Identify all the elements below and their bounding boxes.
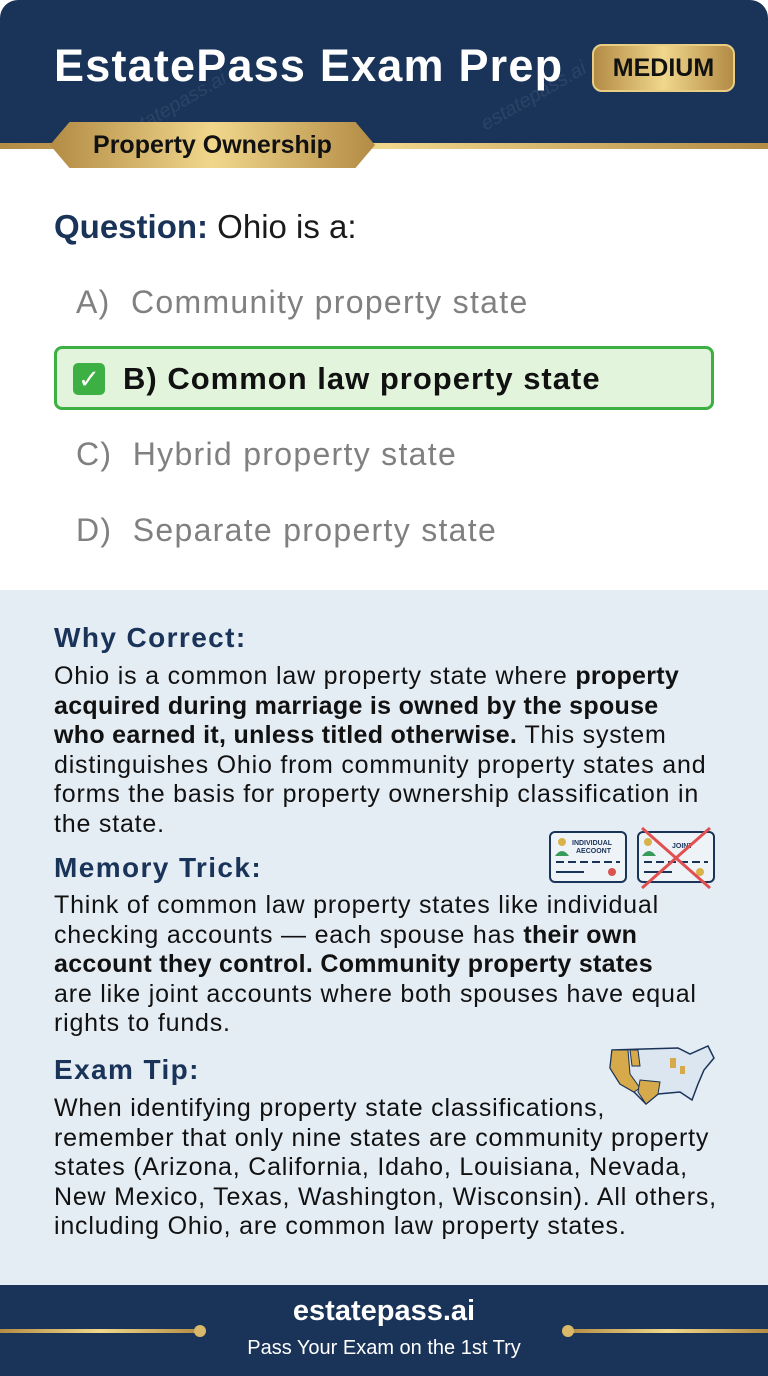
header: estatepass.ai xyxy=(117,67,230,145)
option B correct xyxy=(54,346,714,410)
text: why correct: who earned it, unless titled otherwise. This system xyxy=(54,721,667,749)
question: Question: Ohio is a: xyxy=(54,208,357,245)
footer tagline: Pass Your Exam on the 1st Try xyxy=(247,1337,521,1359)
badge: medium: MEDIUM xyxy=(613,54,714,82)
text: exam tip: New Mexico, Texas, Washington, Wisconsin). All others, xyxy=(54,1182,717,1210)
icon: account cards: AECOONT xyxy=(576,848,612,855)
gold divider line xyxy=(0,143,768,149)
text: memory trick: checking accounts — each spouse has their own xyxy=(54,920,637,948)
icon: check: ✓ xyxy=(78,364,100,394)
text: why correct: forms the basis for property ownership classification in xyxy=(54,780,699,808)
text: why correct: acquired during marriage is owned by the spouse xyxy=(54,692,659,720)
text: why correct: the state. xyxy=(54,810,165,838)
tag: property ownership: Property Ownership xyxy=(93,131,332,159)
text: memory trick: account they control. Community property states xyxy=(54,950,653,978)
icon: account cards: JOINT xyxy=(672,843,693,850)
text: memory trick: Think of common law property states like individual xyxy=(54,891,659,919)
heading: why correct: Why Correct: xyxy=(54,622,247,653)
text: memory trick xyxy=(54,891,697,1037)
footer xyxy=(0,1285,768,1376)
text: exam tip: remember that only nine states are community property xyxy=(54,1124,709,1152)
tag: property ownership xyxy=(50,122,375,168)
text: memory trick: rights to funds. xyxy=(54,1009,231,1037)
text: exam tip: including Ohio, are common law property states. xyxy=(54,1212,627,1240)
badge: medium xyxy=(592,44,735,92)
text: why correct: distinguishes Ohio from community property states and xyxy=(54,750,706,778)
icon: check xyxy=(73,363,105,395)
text: why correct: Ohio is a common law property state where property xyxy=(54,662,679,690)
text: exam tip: states (Arizona, California, Idaho, Louisiana, Nevada, xyxy=(54,1153,688,1181)
footer brand: estatepass.ai xyxy=(293,1295,475,1327)
option B correct: B) Common law property state xyxy=(123,361,601,396)
title: EstatePass Exam Prep xyxy=(54,40,563,91)
text: exam tip: When identifying property state classifications, xyxy=(54,1094,605,1122)
header xyxy=(0,0,768,145)
option A: A) Community property state xyxy=(76,284,529,320)
explanation panel xyxy=(0,590,768,1286)
icon: us map xyxy=(609,1045,715,1105)
text: memory trick: are like joint accounts where both spouses have equal xyxy=(54,980,697,1008)
option C: C) Hybrid property state xyxy=(76,436,457,472)
icon: account cards: INDIVIDUAL xyxy=(572,840,613,847)
header: estatepass.ai xyxy=(477,57,590,135)
text: exam tip xyxy=(54,1094,717,1240)
heading: memory trick: Memory Trick: xyxy=(54,852,262,883)
text: why correct xyxy=(54,662,706,838)
heading: exam tip: Exam Tip: xyxy=(54,1054,200,1085)
option D: D) Separate property state xyxy=(76,512,497,548)
icon: account cards xyxy=(549,827,715,889)
